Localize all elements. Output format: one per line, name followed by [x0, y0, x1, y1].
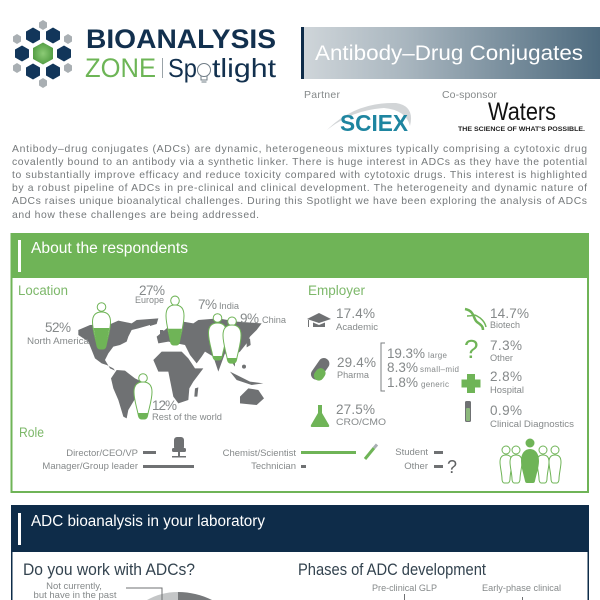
employer: pharma: 8.3% — [387, 360, 418, 375]
co-sponsor logo: Waters: THE SCIENCE OF WHAT'S POSSIBLE. — [458, 127, 585, 133]
intro paragraph: to substantially improve efficacy and reduce toxicity compared with cytotoxic drugs. This interest is highlighted — [12, 170, 587, 181]
employer: cro/cmo — [311, 402, 386, 428]
phase labels — [372, 583, 561, 600]
person: north america — [92, 303, 110, 349]
title banner — [301, 27, 600, 79]
label: china 9% — [240, 311, 287, 326]
employer: pharma — [309, 343, 459, 391]
icon: capsules — [309, 356, 332, 383]
world map — [78, 318, 264, 418]
person: rest of the world — [134, 374, 152, 419]
label: china 9%: 9% — [240, 311, 259, 326]
logo: Bioanalysis Zone Spotlight: tlight — [212, 53, 277, 83]
employer: academic: Academic — [336, 322, 378, 333]
panel: ADC bioanalysis in your laboratory — [11, 505, 589, 600]
co-sponsor logo: Waters: Waters — [488, 98, 556, 126]
employer: pharma: generic — [421, 380, 449, 389]
label: china 9%: China — [262, 315, 287, 326]
role bars: Manager/Group leader — [42, 461, 138, 472]
employer: cro/cmo: 27.5% — [336, 402, 375, 417]
logo: Bioanalysis Zone Spotlight: ZONE — [85, 53, 156, 83]
employer: pharma: 29.4% — [337, 355, 376, 370]
person: china — [223, 317, 241, 363]
label: europe 27%: Europe — [135, 295, 164, 306]
icon: office chair — [172, 437, 186, 458]
icon: plus — [462, 374, 480, 393]
pie chart: Not currently, — [46, 581, 102, 592]
intro paragraph: covalently bound to an antibody via a synthetic linker. There is huge interest in ADCs as they have the potential — [12, 157, 587, 168]
employer: academic — [307, 306, 378, 333]
employer: academic: 17.4% — [336, 306, 375, 321]
intro paragraph: ADCs raises unique bioanalytical challenges. During this Spotlight we have been exploring the analysis of ADCs — [12, 196, 587, 207]
role bars: Chemist/Scientist — [223, 448, 296, 459]
role bars: Director/CEO/VP — [66, 448, 138, 459]
employer: other: 7.3% — [490, 338, 522, 353]
employer: hospital: 2.8% — [490, 369, 522, 384]
employer: cro/cmo: CRO/CMO — [336, 417, 386, 428]
co-sponsor logo: Waters — [442, 89, 585, 133]
employer: clinical diagnostics: 0.9% — [490, 403, 522, 418]
employer: biotech: Biotech — [490, 320, 520, 331]
label: rest of the world 12%: 12% — [152, 398, 177, 413]
role bars — [42, 437, 457, 477]
header bar: ADC bioanalysis: ADC bioanalysis in your laboratory — [31, 513, 265, 530]
label: europe 27%: 27% — [139, 283, 165, 298]
title banner: Antibody–Drug Conjugates — [315, 42, 583, 65]
logo: Bioanalysis Zone Spotlight: Sp — [168, 53, 197, 83]
phase labels: Pre-clinical GLP — [372, 583, 437, 594]
employer: other — [464, 334, 522, 364]
label: rest of the world 12% — [152, 398, 222, 423]
logo: Bioanalysis Zone Spotlight — [13, 20, 277, 88]
icon: question mark: ? — [447, 457, 457, 477]
employer: clinical diagnostics: Clinical Diagnostics — [490, 419, 574, 430]
icon: group of people — [500, 438, 561, 483]
employer: other: Other — [490, 353, 513, 364]
heading: do you work with ADCs: Do you work with ADCs? — [23, 560, 195, 579]
label: india 7%: 7% — [198, 297, 217, 312]
role bars: Technician — [251, 461, 296, 472]
employer: pharma: Pharma — [337, 370, 370, 381]
label: europe 27% — [135, 283, 165, 306]
header bar: ADC bioanalysis — [11, 505, 589, 552]
employer: pharma: 19.3% — [387, 346, 425, 361]
label: north america 52%: North America — [27, 336, 90, 347]
header bar: about the respondents — [11, 233, 589, 278]
intro paragraph: by a robust pipeline of ADCs in pre-clinical and clinical development. The heterogeneity and dynamic nature of — [12, 183, 587, 194]
intro paragraph: and how these challenges are being addressed. — [12, 210, 259, 221]
panel: about the respondents — [11, 233, 589, 492]
employer: biotech — [465, 306, 529, 331]
partner logo: SCIEX: Partner — [304, 89, 340, 101]
icon: hexagon cluster — [13, 20, 72, 88]
employer: clinical diagnostics — [465, 401, 574, 430]
icon: light bulb — [198, 64, 210, 82]
employer: hospital: Hospital — [490, 385, 524, 396]
icon: dna helix — [465, 309, 486, 330]
employer: pharma: large — [428, 351, 448, 360]
employer: pharma: 1.8% — [387, 375, 418, 390]
icon: question mark: ? — [464, 334, 478, 364]
label: north america 52% — [27, 320, 90, 347]
icon: vial — [465, 401, 471, 422]
heading: phases of ADC development: Phases of ADC development — [298, 560, 486, 579]
label: rest of the world 12%: Rest of the world — [152, 412, 222, 423]
heading: location: Location — [18, 283, 68, 298]
heading: employer: Employer — [308, 283, 365, 298]
icon: pencil — [365, 444, 377, 459]
header bar: about the respondents: About the respondents — [31, 240, 188, 257]
heading: role: Role — [19, 425, 44, 440]
employer: pharma: small–mid — [420, 365, 459, 374]
co-sponsor logo: Waters: Co-sponsor — [442, 89, 498, 101]
person: india — [208, 314, 226, 360]
phase labels: Early-phase clinical — [482, 583, 561, 594]
label: india 7% — [198, 297, 240, 312]
icon: flask — [311, 405, 329, 427]
employer: biotech: 14.7% — [490, 306, 529, 321]
intro paragraph: Antibody–drug conjugates (ADCs) are dynamic, heterogeneous mixtures typically comprising a cytotoxic drug — [12, 144, 587, 155]
label: north america 52%: 52% — [45, 320, 71, 335]
partner logo: SCIEX: SCIEX — [340, 110, 409, 136]
role bars: Student — [395, 447, 428, 458]
employer: hospital — [462, 369, 524, 396]
intro paragraph — [12, 144, 587, 221]
role bars: Other — [404, 461, 428, 472]
label: india 7%: India — [219, 301, 240, 312]
pie chart — [34, 581, 212, 600]
person: europe — [166, 296, 184, 345]
partner logo: SCIEX — [304, 89, 411, 136]
icon: graduation cap — [307, 313, 331, 327]
logo: Bioanalysis Zone Spotlight: BIOANALYSIS — [86, 24, 276, 54]
